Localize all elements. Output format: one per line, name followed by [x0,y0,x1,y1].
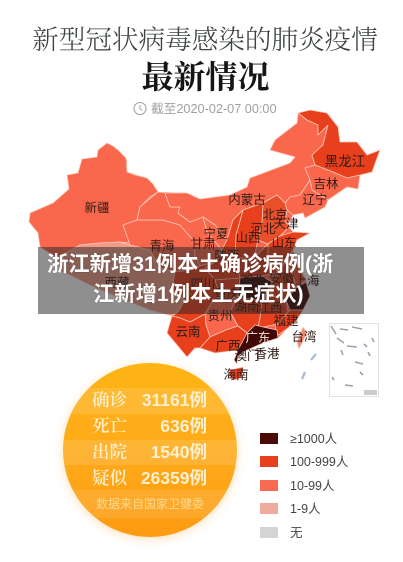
map labels: 甘肃 [190,237,216,251]
map labels: 台湾 [291,329,317,344]
province: Jiangxi [258,296,288,328]
inset map: South China Sea [330,324,378,396]
legend label: 无 [290,526,303,540]
timestamp: 截至2020-02-07 00:00 [151,102,277,116]
province: Anhui [272,262,296,300]
stat: suspected: 疑似 [92,465,127,490]
province: Gansu [137,192,222,266]
province: Guangdong [234,325,278,364]
map labels: 北京 [262,208,288,222]
province: Tibet [57,242,185,316]
map labels: 西藏 [104,276,130,290]
stat: confirmed: 确诊 [92,387,127,412]
map labels: 天津 [273,217,299,231]
stat: recovered: 1540例 [151,442,207,462]
map labels: 山西 [235,231,261,245]
map labels: 黑龙江 [325,154,365,169]
legend swatch: 10-99 [260,480,278,491]
stats circle [63,363,237,537]
map labels: 上海 [294,273,320,288]
stat: recovered: 出院 [92,439,127,464]
province: Sichuan [172,262,220,322]
stat: deaths [92,413,207,438]
province: Hebei [258,195,290,244]
banner text [47,252,334,306]
province: Taiwan [297,327,307,349]
stat: suspected: 26359例 [141,468,207,488]
province: Ningxia [203,217,227,250]
map labels: 云南 [175,324,201,339]
legend label: ≥1000人 [290,432,337,446]
map labels: 安徽 [269,271,295,286]
province: Fujian [275,310,303,336]
legend swatch: 1000 and above [260,433,278,444]
map labels: 山东 [271,236,297,250]
south sea island marks [302,354,316,379]
title line two: 最新情况 [141,52,270,98]
legend [255,428,355,543]
map labels: 湖北 [240,273,266,288]
province: Hainan [229,367,243,380]
banner text: 江新增1例本土无症状) [93,282,304,306]
map labels: 陕西 [214,248,240,263]
legend label: 1-9人 [290,502,321,516]
map labels: 江西 [257,301,283,315]
map labels: 广东 [245,331,271,345]
map labels: 贵州 [207,309,233,323]
province: Guangxi [200,326,247,353]
map labels: 辽宁 [302,192,328,207]
map labels: 内蒙古 [228,192,266,207]
map labels: 广西 [215,339,241,353]
province: Shaanxi [205,210,243,280]
province: Zhejiang [286,282,310,310]
map labels [84,154,365,382]
province: Shandong [262,232,310,262]
map labels: 吉林 [313,177,339,191]
map labels: 澳门 [234,348,260,363]
map labels: 海南 [223,367,249,382]
map labels: 河北 [250,222,276,236]
province: Jiangsu [268,260,306,288]
map labels: 新疆 [84,200,110,215]
map labels: 青海 [149,238,175,253]
stat: confirmed [92,387,207,412]
legend swatch: none [260,527,278,538]
source note: 数据来自国家卫健委 [96,497,204,511]
legend label: 100-999人 [290,455,348,469]
province: Liaoning [285,180,328,218]
stat: suspected [92,465,207,490]
banner text: 浙江新增31例本土确诊病例(浙 [47,252,333,276]
headline banner [38,247,364,314]
province: Inner Mongolia [165,113,328,240]
map labels: 香港 [254,347,280,361]
map labels: 湖南 [234,299,260,314]
map labels: 福建 [273,313,299,328]
map labels: 重庆 [214,286,240,301]
stat: deaths: 636例 [160,416,207,436]
country silhouette [29,110,380,357]
province: Chongqing [215,278,240,302]
province: Hunan [230,296,262,333]
stat: confirmed: 31161例 [142,390,207,410]
province: Shanxi [235,203,263,258]
legend label: 10-99人 [290,479,334,493]
province: Yunnan [167,314,210,357]
stat: deaths: 死亡 [92,413,127,438]
province: Qinghai [123,220,195,272]
province: Guizhou [205,296,238,337]
province: Jilin [305,165,360,200]
map labels: 宁夏 [203,226,229,241]
legend swatch: 1-9 [260,503,278,514]
title line one: 新型冠状病毒感染的肺炎疫情 [32,18,378,57]
province: Xinjiang [29,143,158,258]
legend swatch: 100-999 [260,456,278,467]
province: Heilongjiang [298,110,380,178]
map labels: 四川 [190,277,216,291]
province: Henan [235,244,278,278]
stat: recovered [92,439,207,464]
province: Hubei [238,276,272,300]
